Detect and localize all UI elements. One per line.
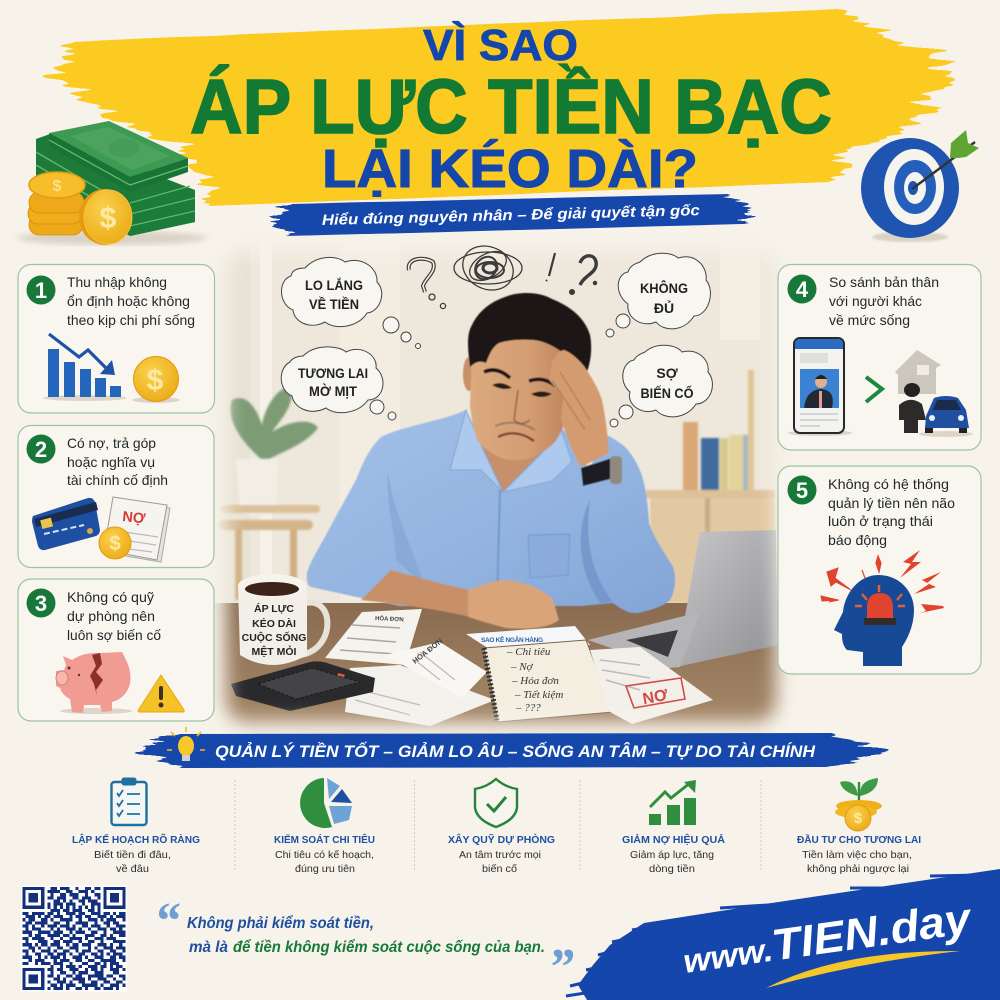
text cause 5: báo động — [828, 532, 887, 548]
icon: small coin: $ — [109, 533, 121, 555]
text cause 1: theo kịp chi phí sống — [67, 312, 195, 328]
watch — [581, 458, 614, 486]
subtitle: Hiểu đúng nguyên nhân – Để giải quyết tận gốc — [322, 202, 701, 229]
icon: small coin — [99, 527, 131, 559]
title line 3: LẠI KÉO DÀI? — [322, 139, 698, 199]
text cause 1: ổn định hoặc không — [67, 293, 190, 309]
quote line 2: để tiền không kiểm soát cuộc sống của bạn. — [233, 939, 545, 956]
icon: falling bar chart — [43, 334, 127, 401]
benefit 5 text: không phải ngược lại — [807, 863, 909, 875]
icon: coin: $ — [147, 364, 164, 397]
benefit 1: plan — [72, 778, 200, 875]
nose and mouth — [514, 390, 530, 424]
benefit 5: invest — [797, 778, 921, 875]
exclamation and question mark right — [546, 253, 597, 294]
number badge 1 — [26, 276, 56, 304]
laptop — [588, 530, 778, 668]
text cause 1: Thu nhập không — [67, 274, 167, 290]
mug text: ÁP LỰC — [254, 603, 294, 615]
benefit 1 text: Biết tiền đi đâu, — [94, 849, 171, 861]
big coin: $ — [100, 202, 117, 235]
panel: cause 2 — [18, 426, 214, 568]
thought bubble: lo lắng về tiền: VỀ TIỀN — [309, 296, 359, 312]
papers and receipts: SAO KÊ NGÂN HÀNG — [481, 635, 543, 644]
icon: head with siren — [821, 550, 944, 666]
benefit 2 text: KIỂM SOÁT CHI TIÊU — [274, 833, 375, 846]
text cause 4: với người khác — [829, 293, 922, 309]
papers and receipts: HÓA ĐƠN — [411, 637, 444, 666]
yellow swoosh — [766, 951, 960, 988]
banner: blue subtitle brush — [272, 194, 750, 236]
panel: cause 4 — [778, 264, 981, 450]
website name: www.TIEN.day — [680, 894, 976, 983]
benefit 2 text: đúng ưu tiên — [295, 863, 355, 875]
papers and receipts — [325, 609, 590, 726]
icon: sprout and coins: $ — [854, 810, 863, 827]
benefit 3: emergency fund — [448, 779, 555, 875]
number badge 5 — [788, 476, 816, 504]
panel: cause 1 — [18, 264, 214, 413]
benefit 4 text: GIẢM NỢ HIỆU QUẢ — [622, 833, 725, 846]
thought bubble: lo lắng về tiền: LO LẮNG — [305, 276, 363, 293]
papers and receipts: HÓA ĐƠN — [375, 614, 404, 623]
number badge 5: 5 — [796, 478, 808, 503]
benefit 4 text: Giảm áp lực, tăng — [630, 849, 714, 861]
panel: cause 3 — [18, 579, 214, 721]
man — [307, 293, 675, 629]
brand corner brush — [566, 869, 1000, 1000]
QR code — [21, 885, 127, 992]
text cause 4: So sánh bản thân — [829, 274, 939, 290]
number badge 4: 4 — [796, 277, 809, 302]
number badge 1: 1 — [35, 278, 47, 303]
benefit 1 text: LẬP KẾ HOẠCH RÕ RÀNG — [72, 833, 200, 846]
benefit 3 text: XÂY QUỸ DỰ PHÒNG — [448, 833, 555, 846]
icon: shield — [475, 779, 517, 827]
mug text: CUỘC SỐNG — [242, 630, 306, 644]
benefit 2 text: Chi tiêu có kế hoạch, — [275, 849, 374, 861]
coin stack: $ — [53, 178, 62, 195]
hair — [468, 293, 591, 378]
handwritten list: – Tiết kiệm — [514, 689, 563, 701]
collar — [450, 410, 503, 492]
icon: house, person and car — [895, 350, 973, 437]
text cause 5: Không có hệ thống — [828, 476, 949, 492]
benefit 3 text: An tâm trước mọi — [459, 849, 541, 861]
coin stack — [28, 172, 85, 235]
number badge 3: 3 — [35, 591, 47, 616]
panel: cause 5 — [778, 466, 981, 674]
thought bubble: lo lắng về tiền — [281, 257, 420, 348]
handwritten list: – ??? — [515, 702, 541, 714]
benefit 3 text: biến cố — [482, 863, 517, 875]
thought bubble: tương lai mờ mịt: TƯƠNG LAI — [298, 366, 368, 381]
icon: warning triangle — [138, 675, 184, 712]
text cause 3: dự phòng nên — [67, 608, 155, 624]
text cause 5: luôn ở trạng thái — [828, 513, 933, 529]
handwritten list: – Nợ — [510, 661, 534, 673]
number badge 2 — [26, 434, 56, 464]
coffee mug — [238, 574, 327, 665]
icon: pie chart — [300, 778, 352, 828]
thought bubble: sợ biến cố: BIẾN CỐ — [640, 384, 694, 401]
plant and stool — [218, 388, 320, 600]
number badge 3 — [26, 588, 56, 618]
thought bubble: không đủ: ĐỦ — [654, 299, 674, 316]
text cause 3: luôn sợ biến cố — [67, 627, 161, 643]
benefit 4 text: dòng tiền — [649, 863, 695, 875]
desk — [214, 603, 790, 734]
mug text: MỆT MỎI — [252, 645, 297, 658]
icon: clipboard — [112, 778, 146, 825]
benefit 4 text — [622, 833, 725, 875]
icon: broken piggy bank — [56, 652, 132, 714]
room background — [218, 249, 776, 603]
icon: money stack and coins — [17, 121, 207, 245]
title — [190, 20, 832, 199]
icon: greater than sign — [866, 377, 882, 402]
thought bubble: không đủ: KHÔNG — [640, 279, 688, 296]
face — [470, 338, 564, 460]
mug text: KÉO DÀI — [252, 617, 296, 630]
icon: phone — [788, 338, 852, 436]
text cause 5: quản lý tiền nên não — [828, 495, 955, 511]
ear — [462, 356, 472, 392]
title line 1: VÌ SAO — [423, 20, 578, 70]
hand on head — [549, 350, 609, 467]
thought bubble: sợ biến cố: SỢ — [656, 365, 678, 381]
slogan: QUẢN LÝ TIỀN TỐT – GIẢM LO ÂU – SỐNG AN TÂM – TỰ DO TÀI CHÍNH — [215, 742, 816, 761]
icon: coin — [132, 356, 180, 403]
icon: light bulb — [167, 727, 205, 761]
benefit 1 text: về đâu — [116, 863, 149, 875]
icon: debt document — [104, 497, 170, 562]
benefit 3 text — [448, 833, 555, 875]
doodles: question marks and scribble — [409, 238, 597, 309]
title line 2: ÁP LỰC TIỀN BẠC — [190, 63, 832, 150]
text cause 4: về mức sống — [829, 312, 910, 328]
forearm and resting hand — [361, 570, 470, 617]
icon: growth chart — [649, 780, 696, 825]
thought bubble: sợ biến cố — [610, 345, 712, 427]
quote line 1: Không phải kiểm soát tiền, — [187, 915, 374, 932]
photo: worried man at desk — [214, 249, 790, 734]
opening quote mark: “ — [154, 893, 180, 950]
number badge 4 — [788, 274, 816, 304]
brows and eyes — [484, 370, 556, 386]
notebook with handwriting — [484, 640, 613, 722]
thought bubble: không đủ — [606, 253, 710, 337]
text cause 2: Có nợ, trả góp — [67, 435, 156, 451]
benefit 2 text — [274, 833, 375, 875]
calculator — [231, 661, 375, 711]
debt statement with stamp — [590, 647, 713, 724]
shelf — [645, 370, 775, 603]
banner: blue slogan brush — [145, 733, 880, 768]
text cause 3: Không có quỹ — [67, 589, 154, 605]
benefit 5 text — [797, 833, 921, 875]
quotation block — [154, 893, 574, 996]
banner: yellow brush stroke — [50, 9, 944, 206]
quote line 2: mà là — [189, 939, 228, 956]
handwritten list: – Chi tiêu — [507, 646, 550, 658]
debt statement with stamp: NỢ — [641, 687, 669, 708]
benefit 1 text — [72, 833, 200, 875]
benefit 2: control spending — [274, 778, 375, 875]
icon: credit card — [32, 498, 100, 550]
scribble — [454, 238, 522, 298]
thought bubble: tương lai mờ mịt: MỜ MỊT — [309, 384, 358, 399]
benefit 5 text: Tiền làm việc cho bạn, — [802, 849, 912, 861]
benefit 4: reduce debt — [622, 780, 725, 875]
text cause 2: tài chính cố định — [67, 472, 168, 488]
big coin — [79, 189, 132, 245]
shirt torso and sleeves — [307, 410, 675, 613]
text cause 2: hoặc nghĩa vụ — [67, 454, 155, 470]
handwritten list: – Hóa đơn — [511, 675, 559, 687]
icon: target with arrow — [861, 130, 979, 242]
closing quote mark: ” — [548, 939, 574, 996]
icon: debt document: NỢ — [122, 509, 147, 527]
neck — [482, 445, 542, 492]
number badge 2: 2 — [35, 437, 47, 462]
benefit 5 text: ĐẦU TƯ CHO TƯƠNG LAI — [797, 833, 921, 846]
question mark left — [409, 259, 446, 309]
thought bubble: tương lai mờ mịt — [281, 347, 396, 420]
